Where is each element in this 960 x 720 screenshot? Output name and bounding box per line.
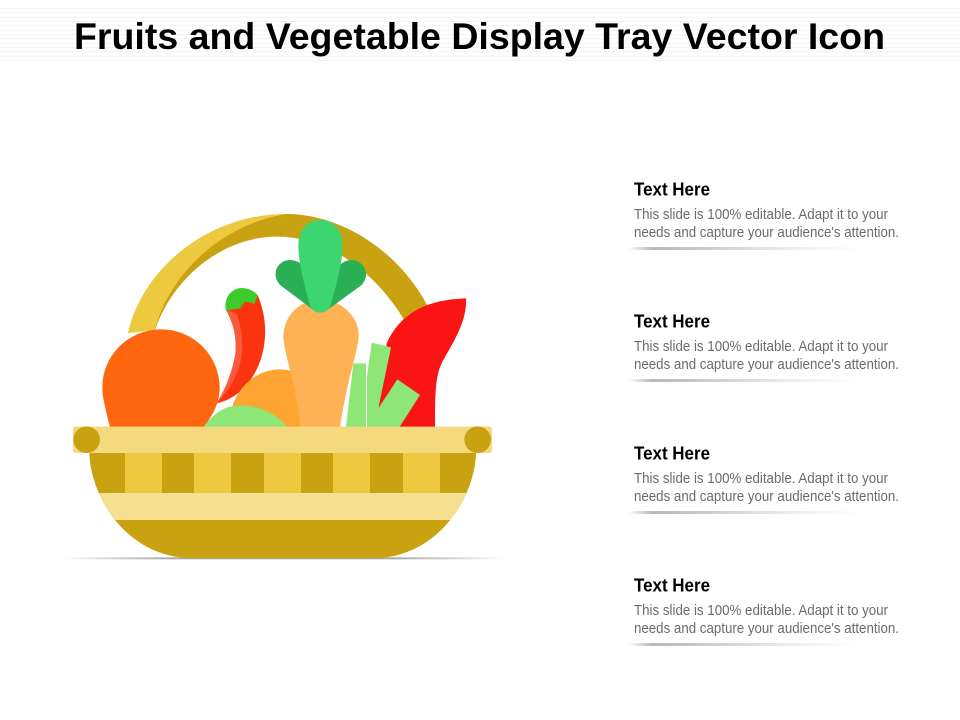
- text block 2: Text Here: [634, 312, 710, 332]
- green melon: [203, 405, 287, 427]
- text block 1: needs and capture your audience's attention.: [634, 224, 899, 241]
- text block 4: [628, 576, 899, 646]
- chili pepper: [217, 288, 265, 403]
- text block 2: This slide is 100% editable. Adapt it to your: [634, 338, 888, 355]
- rim knob left: [73, 426, 100, 453]
- orange round fruit: [102, 329, 220, 427]
- text block 2: needs and capture your audience's attention.: [634, 356, 899, 373]
- title: Fruits and Vegetable Display Tray Vector Icon: [74, 16, 885, 57]
- text block 1: [628, 180, 899, 250]
- text block 2: [628, 312, 899, 382]
- text block 4: This slide is 100% editable. Adapt it to your: [634, 602, 888, 619]
- text block 1: This slide is 100% editable. Adapt it to your: [634, 206, 888, 223]
- text block 3: Text Here: [634, 444, 710, 464]
- rim knob right: [464, 426, 491, 453]
- ground shadow: [63, 557, 503, 559]
- carrot leaves: [276, 260, 313, 310]
- illustration: basket with vegetables: [63, 214, 503, 560]
- basket rim: [73, 427, 492, 453]
- carrot: [276, 220, 366, 427]
- text block 3: This slide is 100% editable. Adapt it to your: [634, 470, 888, 487]
- red pepper: [378, 298, 466, 427]
- text block 4: Text Here: [634, 576, 710, 596]
- text block 1: Text Here: [634, 180, 710, 200]
- green leek stalks: [346, 343, 420, 427]
- text block 3: needs and capture your audience's attention.: [634, 488, 899, 505]
- basket handle: [128, 214, 432, 333]
- orange fruit behind carrot: [233, 369, 320, 427]
- text block 3: [628, 444, 899, 514]
- basket bowl: [87, 448, 480, 560]
- text block 4: needs and capture your audience's attention.: [634, 620, 899, 637]
